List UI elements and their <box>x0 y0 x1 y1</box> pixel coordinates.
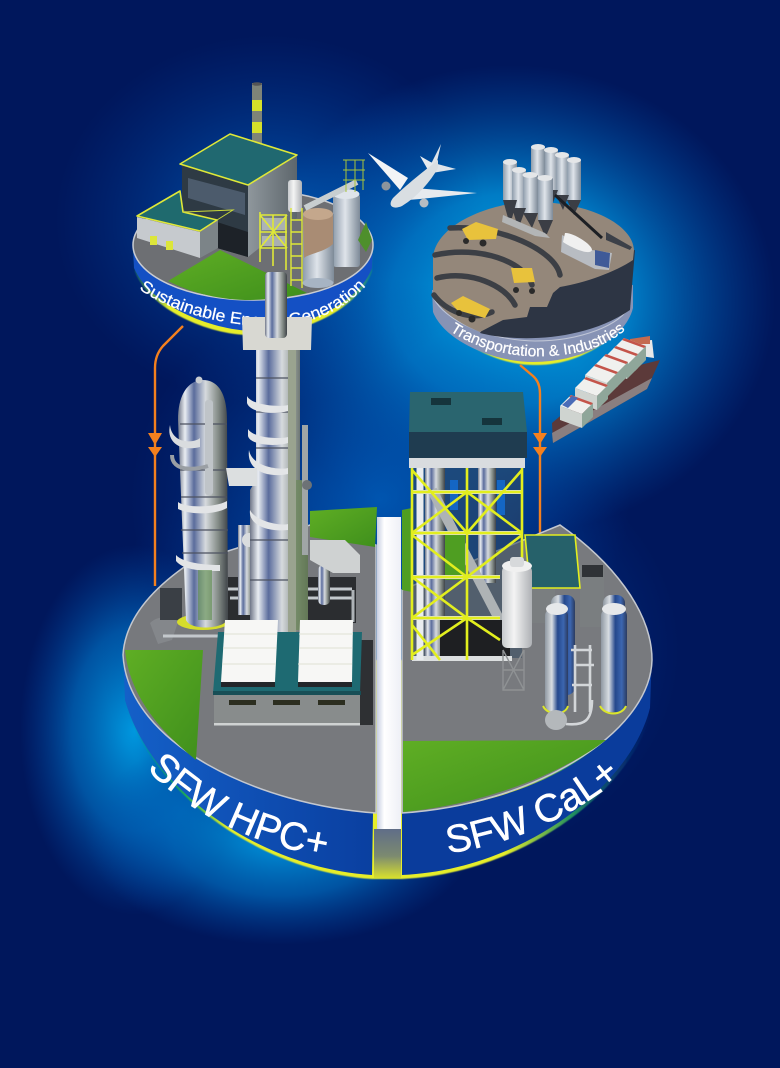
dump trucks <box>451 222 535 318</box>
scaffold tower <box>409 392 527 661</box>
central building <box>213 620 373 726</box>
tower left <box>169 376 229 630</box>
band label: Transportation & Industries <box>453 322 624 356</box>
surface left half <box>123 525 376 813</box>
back grass left <box>310 507 377 547</box>
road <box>374 517 401 878</box>
band <box>432 292 633 365</box>
band label: Sustainable Energy Generation <box>140 281 366 325</box>
arrow: energy to HPC <box>148 326 183 586</box>
cement mixer truck <box>561 233 612 270</box>
disc underglow and band <box>133 248 373 335</box>
band: SFW HPC+ <box>123 652 373 875</box>
plant and silos <box>260 160 372 288</box>
label: SFW HPC+: SFW HPC+ <box>150 754 327 852</box>
connecting platform <box>226 468 257 486</box>
arrow: transport to CaL <box>520 365 547 533</box>
disc rim glow <box>124 660 652 879</box>
main building <box>180 134 297 257</box>
chimney <box>252 82 262 143</box>
main disc <box>122 272 653 880</box>
annex <box>137 191 233 258</box>
band: SFW CaL+ <box>402 652 652 875</box>
right lawn <box>403 740 606 812</box>
back grass right <box>402 508 412 592</box>
container ship <box>552 336 660 443</box>
left lawn <box>125 650 203 760</box>
conveyor <box>555 195 602 238</box>
rock wall <box>480 250 635 338</box>
rear pipework <box>160 525 360 636</box>
disc surface <box>133 190 373 300</box>
quarry terraces <box>434 228 560 316</box>
tower roof <box>409 392 527 468</box>
right disc: transportation and industries <box>431 144 635 366</box>
right process unit <box>502 535 604 690</box>
boulder <box>150 617 178 644</box>
tower right <box>226 350 313 635</box>
grass <box>168 250 307 300</box>
truck wheels <box>456 238 535 322</box>
label: SFW CaL+: SFW CaL+ <box>447 764 613 852</box>
silos <box>502 144 581 238</box>
surface right half <box>402 525 652 813</box>
tower-top pipe and platform <box>242 272 312 350</box>
airplane <box>368 144 477 208</box>
left disc: sustainable energy generation <box>132 82 374 336</box>
quarry surface <box>433 202 634 332</box>
process vessels <box>543 595 627 730</box>
